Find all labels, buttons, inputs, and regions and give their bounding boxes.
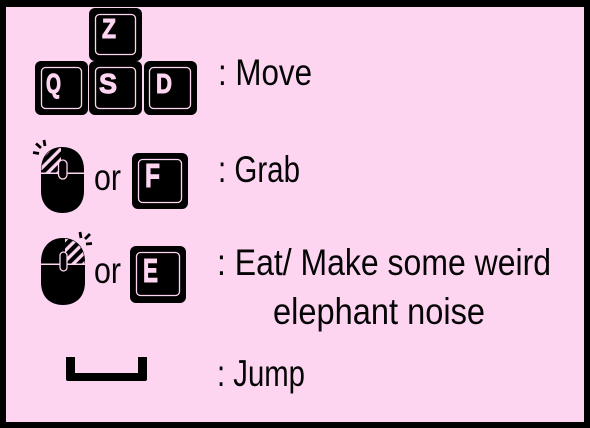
icon: E key: E bbox=[143, 252, 158, 289]
icon: D key bbox=[144, 61, 197, 115]
icon: Z key: Z bbox=[102, 13, 116, 44]
text: grab: : Grab bbox=[218, 149, 300, 190]
icon: mouse left click bbox=[33, 140, 84, 213]
text: or: or bbox=[94, 157, 121, 198]
text: eat / make noise: elephant noise bbox=[273, 291, 485, 332]
text: or: or bbox=[94, 250, 121, 291]
text: move: : Move bbox=[218, 52, 312, 93]
icon: S key bbox=[89, 61, 142, 115]
icon: mouse right click bbox=[41, 232, 92, 305]
icon: E key bbox=[130, 246, 186, 303]
icon: Q key bbox=[35, 61, 88, 115]
icon: S key: S bbox=[99, 68, 117, 99]
text: jump: : Jump bbox=[217, 353, 305, 394]
icon: space bar bbox=[66, 357, 147, 381]
icon: F key bbox=[132, 153, 188, 209]
icon: Z key bbox=[89, 8, 142, 61]
icon: F key: F bbox=[145, 157, 160, 194]
text: eat / make noise bbox=[217, 242, 551, 332]
icon: Q key: Q bbox=[46, 68, 61, 99]
icon: D key: D bbox=[156, 68, 172, 99]
